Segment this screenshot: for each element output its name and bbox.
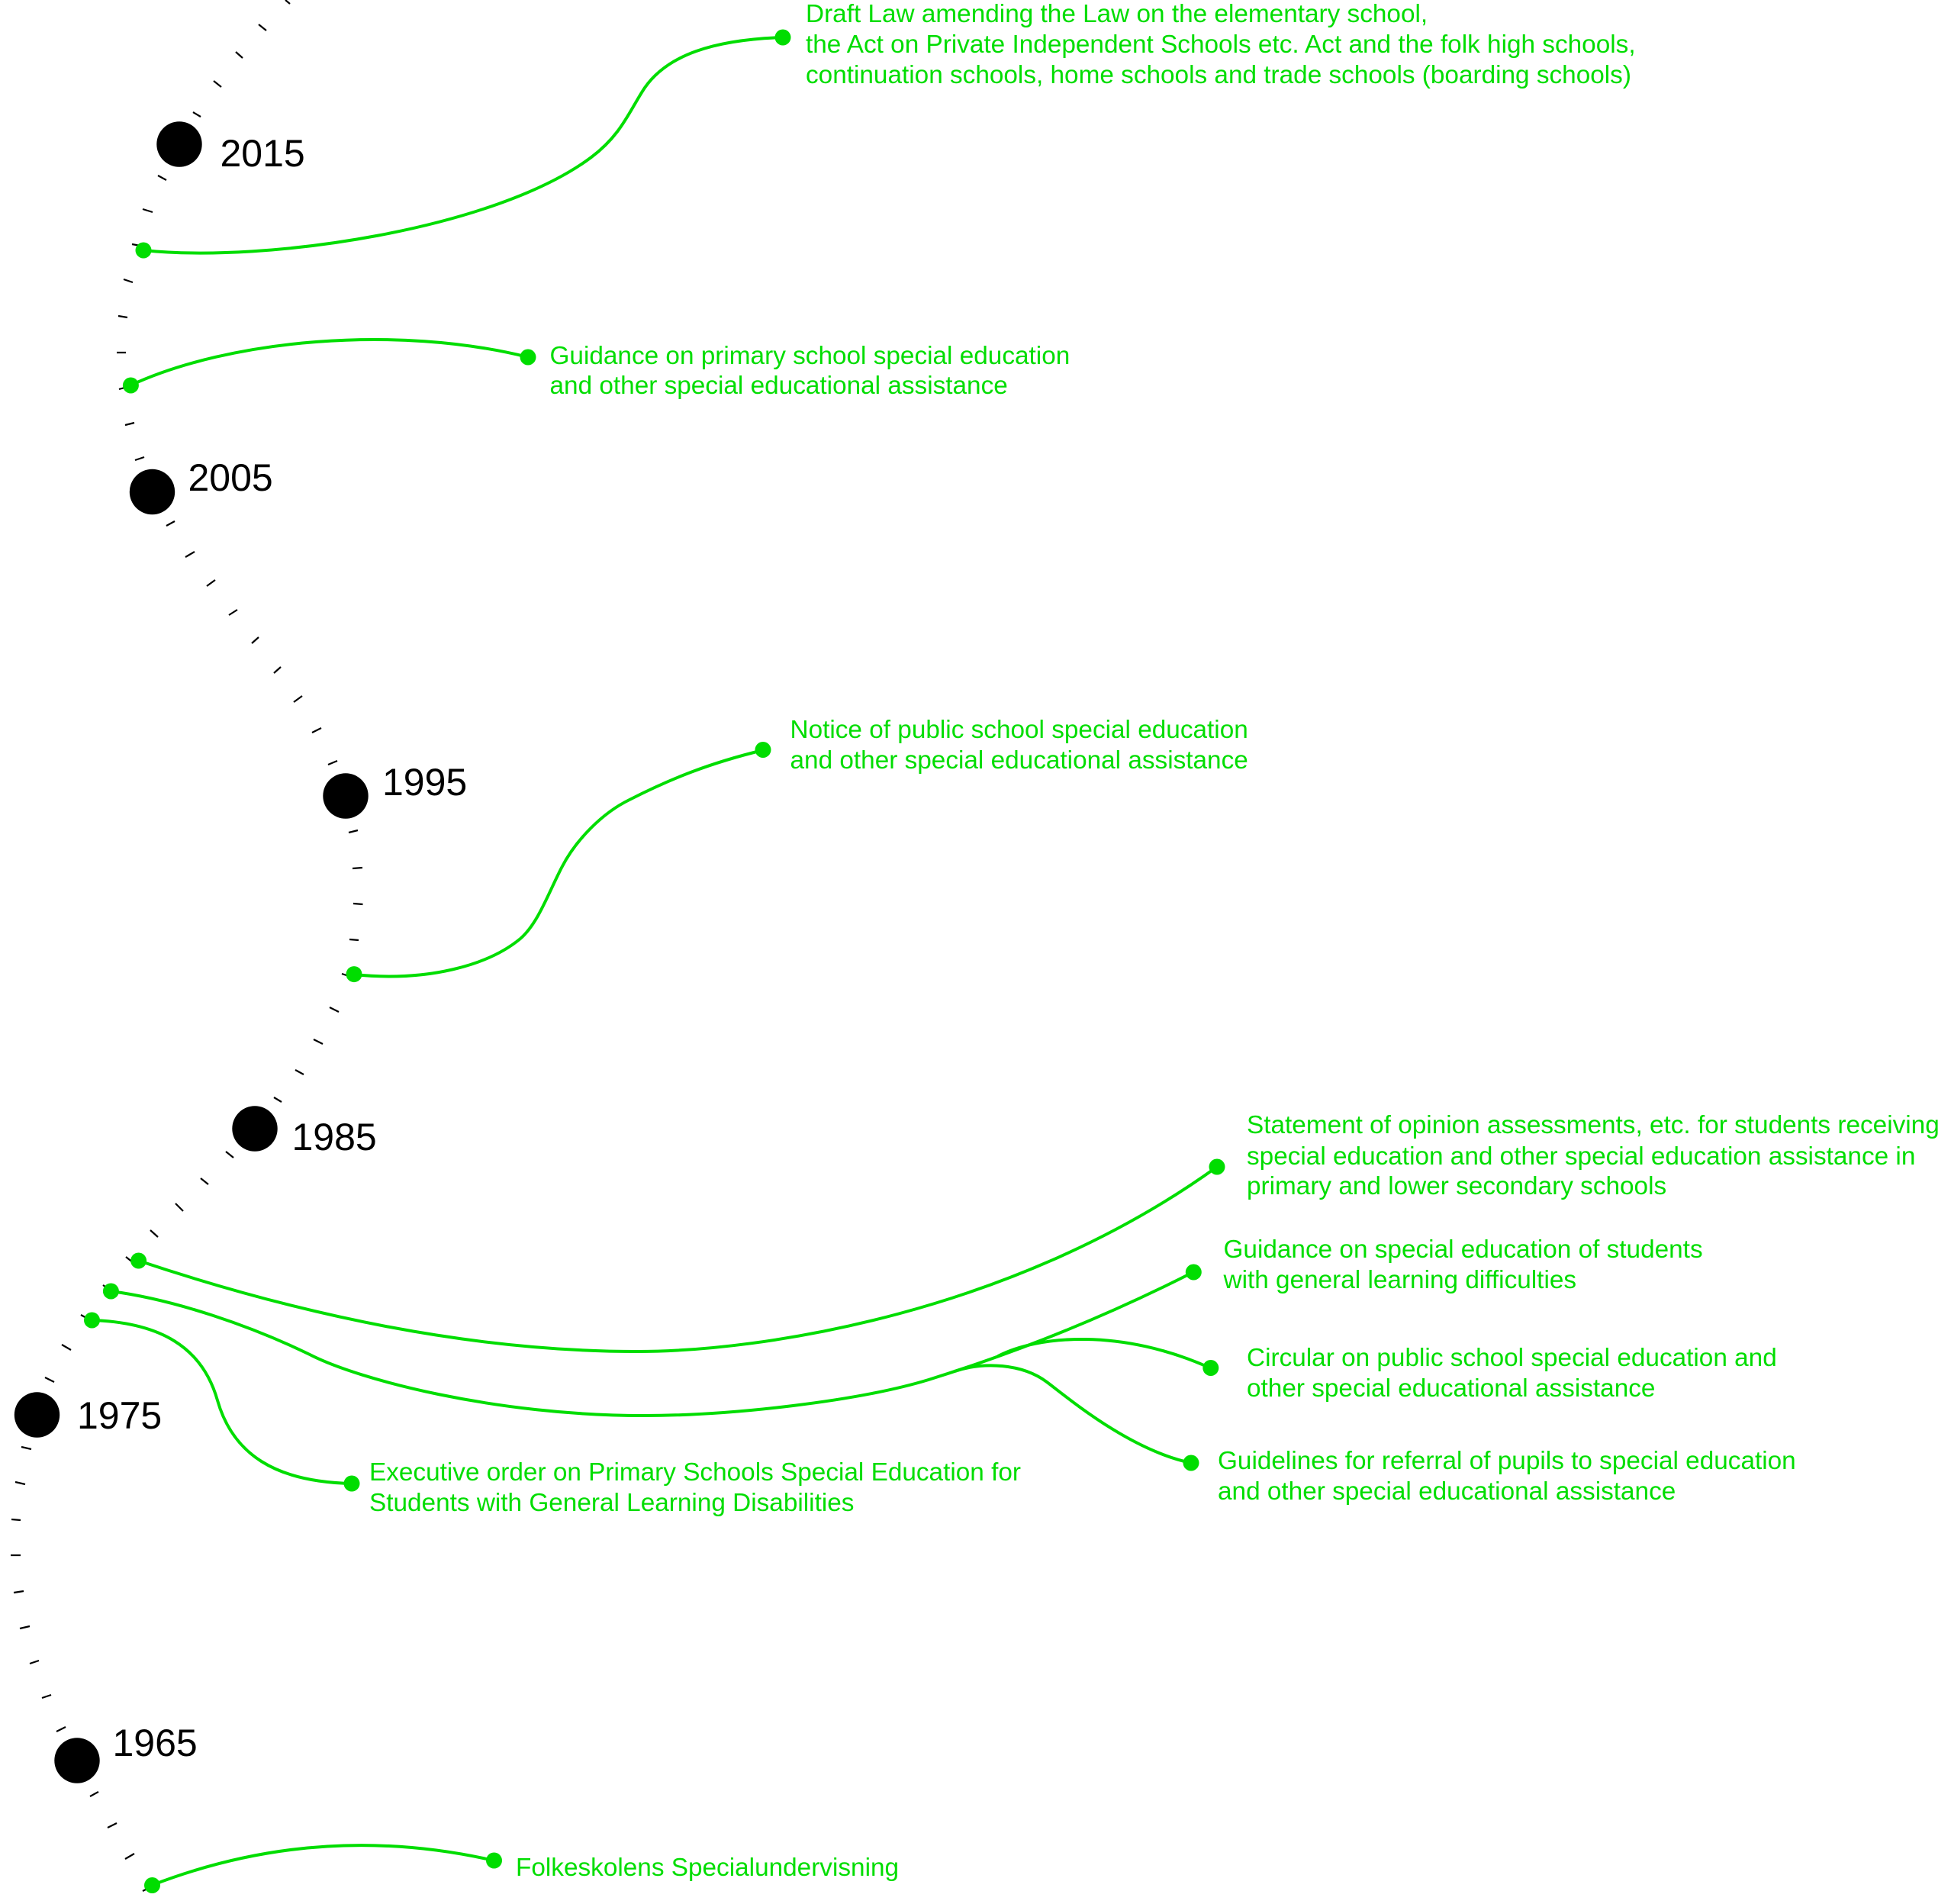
event: Guidelines for referral of pupils [955, 1365, 1796, 1506]
event: Notice of public school special education: and other special educational assistance [790, 746, 1248, 775]
event: Guidance on primary school special education: Guidance on primary school special education [549, 342, 1070, 370]
year marker 1995: 1995 [382, 761, 467, 804]
event: Notice of public school special education [346, 716, 1248, 982]
event: Draft Law: continuation schools, home schools and trade schools (boarding schools) [806, 61, 1631, 89]
event: Executive order: Executive order on Primary Schools Special Education for [369, 1458, 1021, 1487]
event: Notice of public school special education: Notice of public school special education [790, 716, 1248, 744]
year marker 1965 [54, 1722, 198, 1783]
year marker 2015: 2015 [220, 132, 305, 175]
year marker 2005: 2005 [188, 456, 273, 499]
event: Folkeskolens Specialundervisning: Folkeskolens Specialundervisning [516, 1854, 899, 1882]
year marker 2005 [130, 456, 273, 514]
event: Folkeskolens Specialundervisning [144, 1845, 899, 1893]
event: Statement of opinion assessments [130, 1111, 1940, 1351]
event: Statement of opinion assessments: primary and lower secondary schools [1247, 1172, 1666, 1200]
year marker 1985 [232, 1106, 377, 1158]
event: Guidelines for referral of pupils: Guidelines for referral of pupils to special education [1218, 1447, 1796, 1475]
year marker 1975 [14, 1392, 162, 1438]
event: Circular on public school special education [998, 1339, 1777, 1403]
event: Guidance on special education of students: with general learning difficulties [1222, 1266, 1576, 1294]
event: Circular on public school special education: other special educational assistance [1247, 1374, 1655, 1403]
year marker 1995 [323, 761, 467, 819]
event: Guidance on primary school special education [123, 340, 1070, 400]
year marker 1965: 1965 [113, 1722, 198, 1764]
year marker 2015 [156, 121, 305, 175]
event: Guidance on primary school special education: and other special educational assistance [549, 372, 1008, 400]
event: Executive order: Students with General Learning Disabilities [369, 1489, 854, 1517]
event: Draft Law: the Act on Private Independent Schools etc. Act and the folk high schools, [806, 31, 1636, 59]
event: Draft Law [136, 0, 1636, 258]
event: Statement of opinion assessments: special education and other special education assistance in [1247, 1142, 1915, 1171]
year marker 1975: 1975 [77, 1394, 162, 1437]
event: Guidance on special education of students [103, 1236, 1703, 1416]
event: Draft Law: Draft Law amending the Law on the elementary school, [806, 0, 1428, 28]
event: Guidance on special education of students: Guidance on special education of students [1224, 1236, 1703, 1264]
event: Circular on public school special education: Circular on public school special education and [1247, 1344, 1777, 1372]
event: Guidelines for referral of pupils: and other special educational assistance [1218, 1477, 1676, 1506]
event: Statement of opinion assessments: Statement of opinion assessments, etc. for students receiving [1247, 1111, 1940, 1139]
event: Executive order [84, 1313, 1021, 1517]
timeline tick marks [11, 0, 363, 1891]
year marker 1985: 1985 [291, 1116, 377, 1158]
